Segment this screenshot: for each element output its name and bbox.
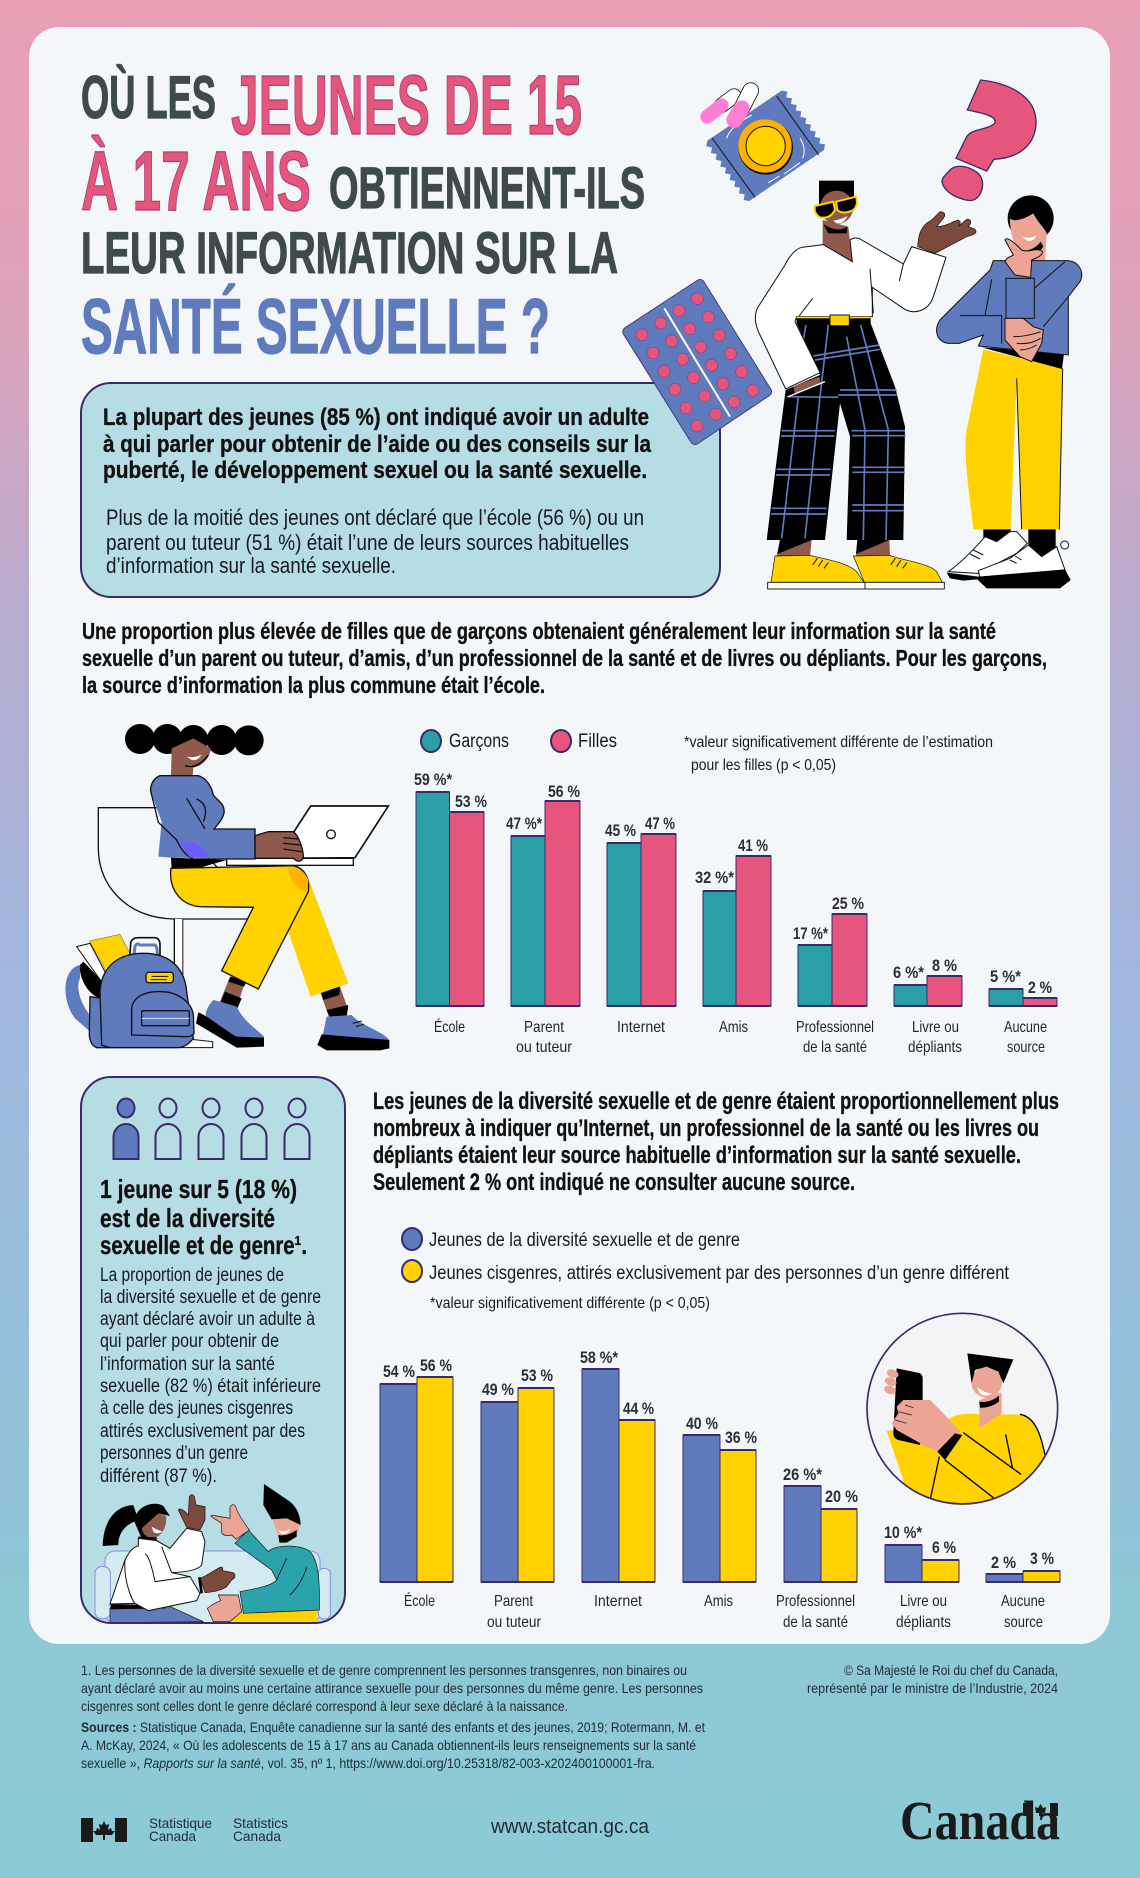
Statistics Canada logo: Canada <box>233 1828 281 1844</box>
bar chart: diverse vs cisgender youth: 49 % <box>482 1380 514 1399</box>
panel body text: différent (87 %). <box>100 1466 217 1487</box>
panel body text: sexuelle (82 %) était inférieure <box>100 1376 321 1397</box>
bar chart: boys vs girls: Amis <box>719 1019 748 1036</box>
sources: sexuelle », Rapports sur la santé, vol. 35, nº 1, https://www.doi.org/10.25318/82-003-x202400100001-fra. <box>81 1755 655 1771</box>
yellow shoes <box>771 555 864 582</box>
icon: five person pictogram <box>114 1098 310 1159</box>
brown raised hand <box>918 212 976 253</box>
title: JEUNES DE 15 <box>231 58 582 152</box>
left person <box>103 1495 235 1623</box>
bar chart: boys vs girls: 8 % <box>932 956 957 975</box>
bar chart: boys vs girls: 32 %* <box>695 868 734 887</box>
Statistics Canada logo: Statistique <box>149 1815 212 1831</box>
back leg <box>288 878 389 1050</box>
ankles <box>777 540 812 556</box>
bar chart: boys vs girls: 6 %* <box>893 963 924 982</box>
front leg: yellow trousers <box>171 866 309 1010</box>
bar chart: diverse vs cisgender youth: 44 % <box>623 1399 654 1418</box>
bar chart: boys vs girls: 56 % <box>548 782 580 801</box>
bar chart: boys vs girls: Internet <box>617 1019 665 1036</box>
clasped hand <box>1005 318 1043 362</box>
bar chart: boys vs girls: 25 % <box>832 894 864 913</box>
panel: key findings callout: puberté, le développement sexuel ou la santé sexuelle. <box>103 457 647 484</box>
paragraph: sexually and gender diverse youth <box>373 1088 1059 1196</box>
bar chart: boys vs girls: 53 % <box>455 792 487 811</box>
icon: condom packet <box>706 91 825 201</box>
title: À 17 ANS <box>81 134 311 228</box>
significance note <box>684 734 993 774</box>
Statistics Canada logo <box>81 1815 288 1844</box>
bar chart: boys vs girls: Livre ou <box>912 1019 959 1036</box>
footnote <box>81 1662 703 1714</box>
bar chart: diverse vs cisgender youth: 53 % <box>521 1366 553 1385</box>
icon: backpack <box>65 934 213 1048</box>
copyright: © Sa Majesté le Roi du chef du Canada, <box>844 1662 1058 1678</box>
panel heading: 1 jeune sur 5 (18 %) <box>100 1174 297 1204</box>
title: SANTÉ SEXUELLE ? <box>81 282 550 370</box>
belt <box>797 317 871 324</box>
bar chart: boys vs girls: 41 % <box>738 836 768 855</box>
panel body text: ayant déclaré avoir un adulte à <box>100 1309 315 1330</box>
chair <box>98 808 255 976</box>
title: OÙ LES <box>81 64 216 131</box>
panel: key findings callout: La plupart des jeunes (85 %) ont indiqué avoir un adulte <box>103 404 649 431</box>
plaid pants <box>767 323 905 540</box>
bar chart: diverse vs cisgender youth: 2 % <box>991 1553 1016 1572</box>
title: LEUR INFORMATION SUR LA <box>81 221 618 286</box>
copyright <box>807 1662 1058 1696</box>
right person <box>207 1484 319 1622</box>
sources: Sources : Statistique Canada, Enquête canadienne sur la santé des enfants et des jeunes, 2019; Rotermann, M. et <box>81 1719 705 1735</box>
bar chart: boys vs girls <box>414 770 1057 1056</box>
bar chart: diverse vs cisgender youth: 56 % <box>420 1356 452 1375</box>
panel: key findings callout: Plus de la moitié des jeunes ont déclaré que l’école (56 %) ou un <box>106 505 644 530</box>
legend: boys and girls: Garçons <box>449 731 509 752</box>
legend: boys and girls: Filles <box>578 731 617 752</box>
footnote: 1. Les personnes de la diversité sexuelle et de genre comprennent les personnes transgenres, non binaires ou <box>81 1662 687 1678</box>
significance note: pour les filles (p < 0,05) <box>691 757 836 774</box>
bar chart: boys vs girls: Parent <box>524 1019 564 1036</box>
bar chart: boys vs girls: de la santé <box>803 1039 867 1056</box>
bar chart: diverse vs cisgender youth: 54 % <box>383 1362 415 1381</box>
bar chart: boys vs girls: source <box>1007 1039 1045 1056</box>
bar chart: diverse vs cisgender youth: Internet <box>594 1593 642 1610</box>
sources: A. McKay, 2024, « Où les adolescents de 15 à 17 ans au Canada obtiennent-ils leurs renseignements sur la santé <box>81 1737 696 1753</box>
title <box>81 58 645 370</box>
laptop <box>227 806 388 865</box>
panel body text: attirés exclusivement par des <box>100 1421 305 1442</box>
website: www.statcan.gc.ca <box>490 1816 650 1838</box>
ankles <box>983 529 1011 544</box>
panel body text: l’information sur la santé <box>100 1354 275 1375</box>
panel: key findings callout: parent ou tuteur (51 %) était l’une de leurs sources habituelles <box>106 530 629 555</box>
icon: question mark <box>942 80 1036 200</box>
bar chart: boys vs girls: 17 %* <box>793 924 828 943</box>
bar chart: diverse vs cisgender youth: dépliants <box>896 1614 951 1631</box>
bar chart: diverse vs cisgender youth: 40 % <box>686 1414 718 1433</box>
legend: diverse and cisgender youth <box>402 1228 1010 1284</box>
panel body text: la diversité sexuelle et de genre <box>100 1287 321 1308</box>
illustration: two youth talking on a sofa <box>95 1484 330 1623</box>
panel: key findings callout: à qui parler pour obtenir de l’aide ou des conseils sur la <box>103 431 652 458</box>
bar chart: diverse vs cisgender youth: 58 %* <box>580 1348 618 1367</box>
panel: key findings callout <box>81 383 720 597</box>
bar chart: boys vs girls: dépliants <box>908 1039 962 1056</box>
Statistics Canada logo: Statistics <box>233 1815 288 1831</box>
bar chart: diverse vs cisgender youth: Aucune <box>1001 1593 1045 1610</box>
pocket hand <box>793 377 821 394</box>
bar chart: diverse vs cisgender youth: source <box>1004 1614 1043 1631</box>
bar chart: diverse vs cisgender youth: ou tuteur <box>487 1614 542 1631</box>
bar chart: boys vs girls: 5 %* <box>990 967 1021 986</box>
bar chart: diverse vs cisgender youth: Parent <box>494 1593 533 1610</box>
illustration: youth with smartphone in circle <box>867 1313 1058 1512</box>
bar chart: boys vs girls: 47 % <box>645 814 675 833</box>
yellow trousers <box>966 349 1063 529</box>
intro paragraph: girls vs boys: la source d’information la plus commune était l’école. <box>82 672 545 698</box>
intro paragraph: girls vs boys <box>82 618 1047 698</box>
illustration: two people with contraceptives <box>627 80 1082 589</box>
bar chart: diverse vs cisgender youth: École <box>404 1591 435 1610</box>
sweater <box>151 776 255 870</box>
panel body text <box>100 1265 321 1487</box>
footnote: cisgenres sont celles dont le genre déclaré correspond à leur sexe déclaré à la naissance. <box>81 1698 568 1714</box>
sources <box>81 1719 705 1771</box>
bar chart: boys vs girls: 59 %* <box>414 770 452 789</box>
Statistics Canada logo: Canada <box>149 1828 196 1844</box>
panel: key findings callout: d’information sur la santé sexuelle. <box>106 553 396 578</box>
bar chart: diverse vs cisgender youth: 6 % <box>932 1538 956 1557</box>
bar chart: boys vs girls: Professionnel <box>796 1019 874 1036</box>
panel body text: qui parler pour obtenir de <box>100 1331 279 1352</box>
hair and face <box>125 724 264 777</box>
icon: pills <box>707 91 751 120</box>
bar chart: boys vs girls: Aucune <box>1004 1019 1047 1036</box>
bar chart: boys vs girls: ou tuteur <box>516 1039 573 1056</box>
footnote: ayant déclaré avoir au moins une certaine attirance sexuelle pour des personnes du même genre. Les personnes <box>81 1680 703 1696</box>
bar chart: diverse vs cisgender youth: Professionnel <box>776 1593 855 1610</box>
panel body text: La proportion de jeunes de <box>100 1265 284 1286</box>
legend: diverse and cisgender youth: Jeunes cisgenres, attirés exclusivement par des personnes d’un genre différent <box>429 1263 1010 1284</box>
white blouse <box>755 238 946 389</box>
bar chart: diverse vs cisgender youth <box>380 1348 1060 1631</box>
Canada wordmark: Canada <box>900 1790 1060 1851</box>
panel heading <box>100 1174 307 1260</box>
significance note: *valeur significativement différente de l’estimation <box>684 734 993 751</box>
copyright: représenté par le ministre de l’Industrie, 2024 <box>807 1680 1058 1696</box>
title: OBTIENNENT-ILS <box>329 156 645 221</box>
legend: boys and girls <box>421 730 617 752</box>
blue sweater <box>937 261 1082 355</box>
legend: diverse and cisgender youth: Jeunes de la diversité sexuelle et de genre <box>429 1230 740 1251</box>
bar chart: diverse vs cisgender youth: 20 % <box>825 1487 858 1506</box>
chin hand <box>1005 239 1043 277</box>
bar chart: diverse vs cisgender youth: 36 % <box>725 1428 757 1447</box>
bar chart: boys vs girls: 45 % <box>605 821 636 840</box>
bar chart: diverse vs cisgender youth: 3 % <box>1030 1549 1054 1568</box>
panel: 1 in 5 youth <box>81 1077 345 1623</box>
bar chart: boys vs girls: 47 %* <box>506 814 542 833</box>
bar chart: diverse vs cisgender youth: 26 %* <box>783 1465 822 1484</box>
person: woman with sunglasses <box>755 181 976 589</box>
bar chart: diverse vs cisgender youth: Amis <box>704 1593 733 1610</box>
panel heading: est de la diversité <box>100 1203 275 1233</box>
front shoe <box>196 1000 264 1048</box>
significance note: *valeur significativement différente (p < 0,05) <box>430 1295 710 1312</box>
paragraph: sexually and gender diverse youth: Seulement 2 % ont indiqué ne consulter aucune source. <box>373 1169 855 1196</box>
bar chart: diverse vs cisgender youth: 10 %* <box>884 1523 922 1542</box>
bar chart: diverse vs cisgender youth: de la santé <box>783 1614 848 1631</box>
panel body text: personnes d’un genre <box>100 1443 248 1464</box>
white sneakers <box>948 532 1027 573</box>
hand on laptop <box>255 832 303 861</box>
bar chart: boys vs girls: École <box>434 1017 465 1036</box>
illustration: student with laptop and backpack <box>65 724 389 1050</box>
panel body text: à celle des jeunes cisgenres <box>100 1398 293 1419</box>
panel heading: sexuelle et de genre¹. <box>100 1230 307 1260</box>
icon: birth control pill pack <box>627 284 767 440</box>
bar chart: boys vs girls: 2 % <box>1028 978 1052 997</box>
bar chart: diverse vs cisgender youth: Livre ou <box>900 1593 947 1610</box>
person: thinking youth <box>937 195 1082 588</box>
